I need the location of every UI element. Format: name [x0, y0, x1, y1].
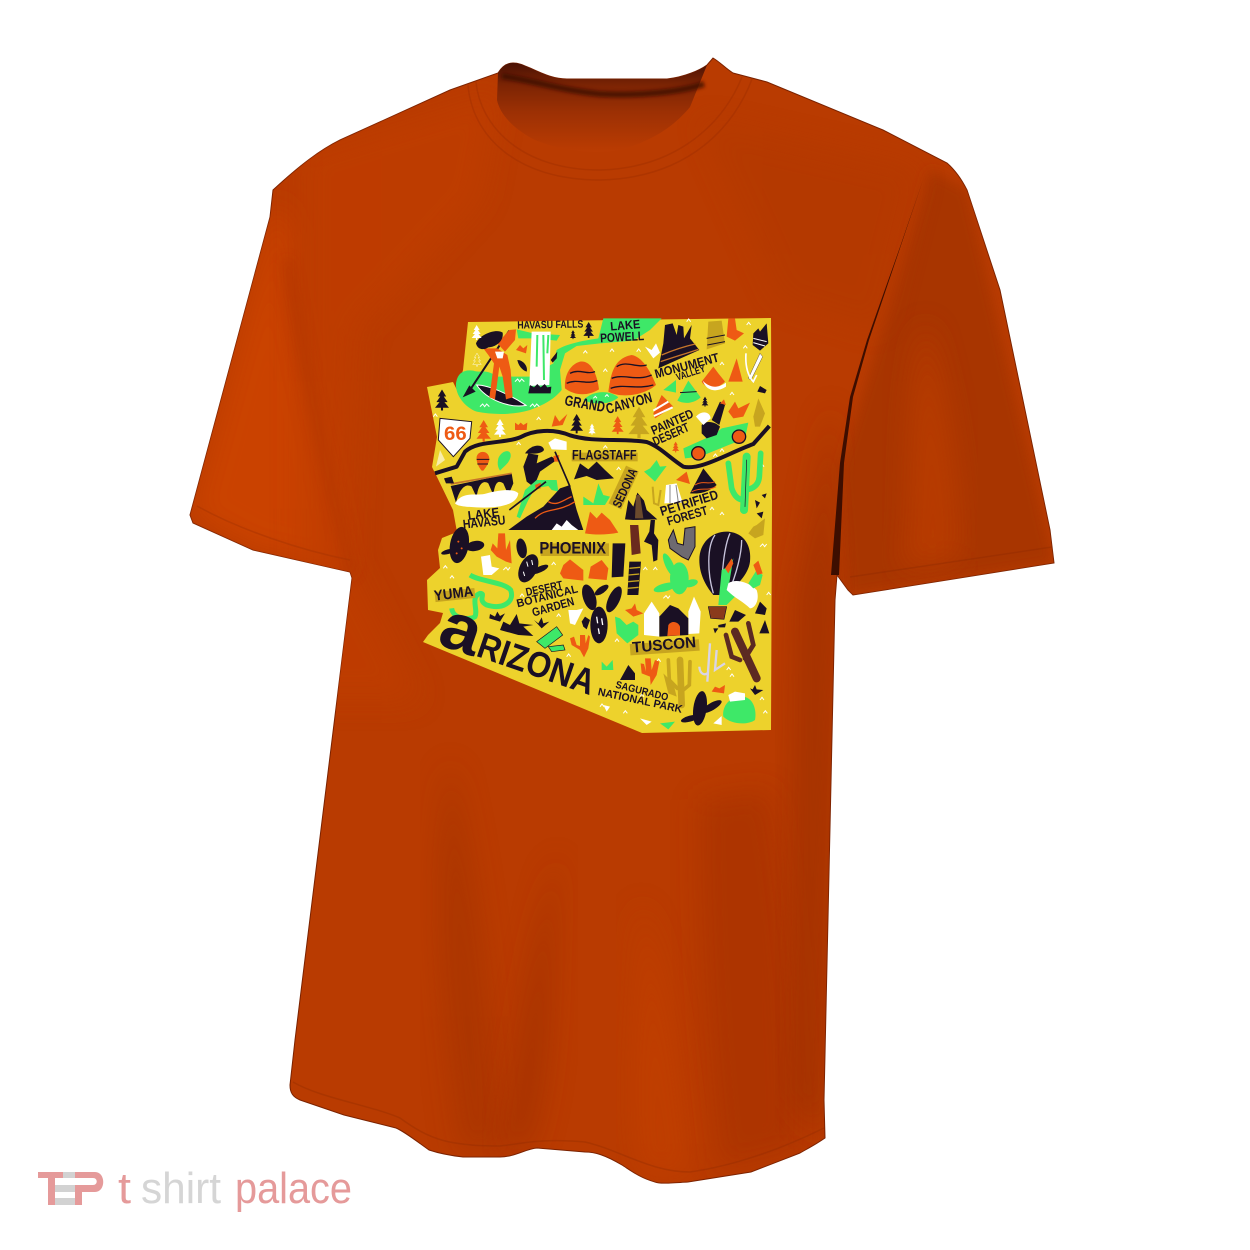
word: ARIZONA title: RIZONA [472, 624, 601, 703]
icon: prickly pear south [680, 690, 723, 726]
icon: jeep driver [683, 399, 748, 460]
logo wordmark: shirt: shirt [141, 1164, 221, 1213]
label: Lake Powell: POWELL [600, 329, 645, 345]
sleeve seam right [831, 180, 923, 575]
icon: hot air balloon cactus [699, 532, 763, 619]
label: Grand: GRAND [563, 393, 606, 416]
icon: green cactus centre [615, 552, 699, 643]
label: Petrified Forest [658, 487, 720, 529]
icon: green barrel [723, 692, 756, 723]
logo mark TSP [38, 1172, 103, 1205]
icon: white striped rock [481, 555, 499, 575]
icon: Tucson mission [644, 597, 701, 637]
icon: saguaro cactus green [728, 453, 761, 510]
small scattered marks south [443, 544, 771, 713]
label: Lake Havasu: LAKE [467, 505, 500, 523]
road: Route 66 [435, 426, 769, 473]
icon: route 66 shield: 66 [444, 424, 467, 445]
icon: paddle boarder [463, 329, 526, 406]
icon: rock formations centre east [583, 460, 767, 520]
collar ribbing [468, 77, 752, 180]
icon: white outline cactus [699, 643, 725, 682]
label: Petrified Forest: FOREST [665, 504, 709, 529]
label: Painted Desert: DESERT [651, 420, 691, 449]
lake and river [456, 318, 662, 414]
logo wordmark: palace: palace [235, 1164, 352, 1213]
logo wordmark: t: t [118, 1164, 131, 1213]
icon: balloon and bridge [444, 451, 518, 508]
label: Painted Desert: PAINTED [649, 407, 696, 438]
northeast rocks and decorations [653, 318, 768, 418]
icon: striped black cactus [668, 527, 695, 560]
label: Sedona [608, 466, 640, 510]
icon: tall prickly pear [579, 583, 625, 643]
label: Painted Desert [649, 407, 696, 449]
small scattered marks north [433, 319, 764, 515]
icon: barrel cactus green [537, 627, 565, 652]
icon: prickly pear west [441, 525, 485, 565]
icon: agave plants [489, 612, 590, 636]
icon: mountain [508, 485, 583, 530]
shirt body silhouette [190, 58, 1054, 1183]
label: Saguaro National Park: NATIONAL PARK [597, 686, 683, 716]
label: Lake Powell: LAKE [610, 317, 641, 334]
icon: orange canyon rocks [560, 559, 608, 581]
word: ARIZONA title: a [431, 588, 494, 671]
label: Monument Valley: MONUMENT [653, 351, 721, 381]
label: Lake Powell [600, 317, 645, 345]
label: Phoenix: PHOENIX [539, 539, 606, 558]
icon: black prickly pear Phoenix [514, 538, 549, 586]
black rocks near Tucson [620, 602, 769, 680]
small plants south [750, 685, 763, 695]
label: Petrified Forest: PETRIFIED [658, 487, 720, 519]
label: Desert Botanical Garden: BOTANICAL [515, 583, 579, 610]
logo: t shirt palace [38, 1164, 352, 1213]
trees and plants north [435, 322, 765, 467]
icon: waterfall [528, 332, 551, 393]
icon: Monument Valley butte [658, 323, 699, 368]
fabric shading [190, 90, 1054, 1175]
hem stitch [293, 1082, 824, 1172]
icon: route 66 shield [438, 418, 472, 457]
icon: skyscrapers [612, 520, 658, 595]
map silhouette [423, 318, 772, 733]
label: Canyon: CANYON [604, 390, 654, 418]
Arizona map print [423, 317, 772, 733]
icon: hiker [509, 438, 570, 518]
icon: brown saguaro [726, 623, 757, 678]
label: Lake Havasu: HAVASU [462, 513, 506, 532]
label: Tuscon: TUSCON [632, 634, 697, 657]
label: Desert Botanical Garden: DESERT [525, 579, 564, 599]
south section artwork [431, 512, 771, 729]
icon: snake [452, 575, 512, 619]
label: Saguaro National Park: SAGURADO [614, 680, 669, 704]
label: Havasu Falls: HAVASU FALLS [517, 319, 583, 332]
t-shirt [190, 58, 1054, 1183]
label: Desert Botanical Garden: GARDEN [530, 594, 576, 620]
label: Desert Botanical Garden [515, 579, 579, 620]
label: Flagstaff: FLAGSTAFF [572, 446, 637, 462]
north section artwork [433, 317, 769, 532]
icon: gold saguaro [668, 660, 690, 705]
neck shadow [502, 76, 704, 95]
icon: orange cactus [491, 533, 512, 563]
icon: orange rocks [585, 512, 618, 535]
icon: orange cacti [570, 635, 659, 685]
word: ARIZONA title [431, 588, 601, 703]
inside neck [497, 63, 707, 152]
icon: black rocks near Flagstaff [574, 462, 614, 480]
label: Sedona: SEDONA [610, 466, 640, 510]
label: Monument Valley: VALLEY [675, 364, 707, 384]
icon: Grand Canyon rocks [565, 355, 656, 395]
label: Yuma: YUMA [433, 584, 475, 605]
label: Lake Havasu [462, 505, 506, 532]
